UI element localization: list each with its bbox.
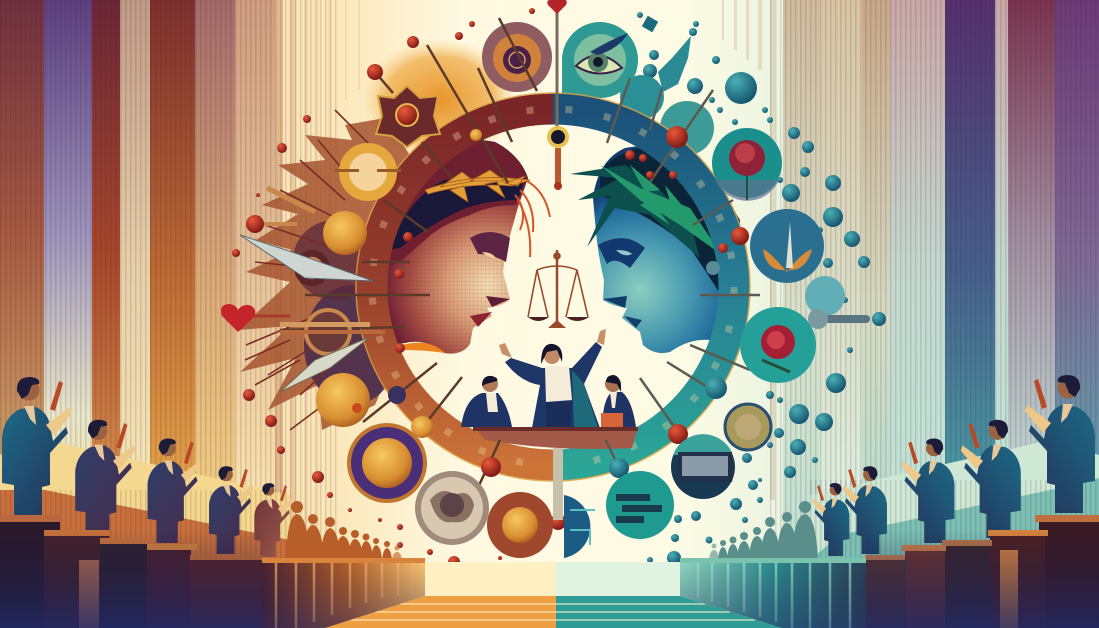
orange haze top left: [362, 38, 518, 162]
medallion top left: [482, 22, 552, 92]
centre glow left: [425, 562, 556, 596]
centre needle: [547, 12, 569, 190]
man 2: [75, 420, 135, 538]
leaf medallion: [750, 209, 824, 283]
star emblem: [376, 86, 440, 147]
rose medallion top: [712, 128, 782, 201]
left face: [370, 140, 550, 354]
man 9: [842, 466, 887, 554]
gold ring medallion: [335, 148, 401, 196]
man 5: [254, 483, 292, 557]
monitor medallion: [671, 434, 735, 499]
right men: [812, 375, 1095, 556]
spear head right: [658, 36, 691, 92]
judge bench: [473, 427, 638, 449]
man 1: [2, 377, 72, 515]
spiky halo left: [238, 110, 420, 430]
left nose and lips: [470, 312, 492, 327]
right hair: [600, 148, 735, 310]
man 3: [148, 439, 201, 543]
small diamond: [642, 16, 658, 32]
teal medallion top right: [620, 75, 664, 119]
man 8: [901, 439, 954, 543]
eye medallion: [562, 22, 638, 98]
right nose and lips: [624, 316, 642, 328]
red knob pin: [246, 215, 297, 233]
left curtains columns: [0, 0, 360, 550]
bottom centre post: [553, 448, 563, 520]
gold sphere upper: [323, 211, 367, 255]
benches right: [680, 515, 1099, 628]
bars medallion: [606, 471, 674, 539]
brass gear: [280, 310, 385, 354]
compass disc: [725, 404, 771, 450]
right face: [570, 146, 740, 353]
distant audience right: [709, 501, 818, 560]
left laurel: [425, 170, 530, 202]
pale disc: [805, 276, 845, 316]
silver blade lower: [280, 337, 370, 392]
right laurel: [600, 165, 722, 255]
ring markings: [372, 109, 734, 465]
gold sphere lower: [316, 373, 370, 427]
halo right dots: [607, 12, 886, 578]
left scatter dots: [232, 8, 535, 588]
right barrister: [601, 375, 636, 427]
ring left half: [372, 109, 553, 465]
teal sphere: [725, 72, 757, 104]
wainscot right: [810, 440, 1099, 560]
floor left: [325, 596, 556, 628]
scales of justice: [528, 250, 589, 328]
wainscot left: [0, 440, 290, 560]
right gauge disc: [660, 101, 714, 155]
tube pin: [267, 188, 315, 212]
ring outline: [356, 93, 750, 481]
stair lines: [350, 604, 755, 620]
right curtains columns: [722, 0, 1099, 540]
ring pins left: [280, 18, 537, 520]
rose medallion lower: [740, 307, 816, 383]
ring right half: [553, 109, 734, 465]
distant audience left: [286, 501, 402, 560]
ring pins right: [606, 78, 760, 470]
silver spear: [240, 235, 373, 281]
circuit medallion: [564, 495, 595, 558]
gold dial medallion: [347, 423, 427, 503]
striped disc: [294, 250, 330, 286]
ring knobs: [367, 64, 749, 530]
left barrister: [461, 376, 512, 427]
top heart pin: [547, 0, 567, 14]
man 6: [1025, 375, 1095, 513]
silver pin right: [808, 309, 870, 329]
man 7: [961, 420, 1021, 538]
centre glow right: [556, 562, 680, 596]
floor right: [556, 596, 782, 628]
central judge: [499, 329, 606, 428]
left men: [2, 377, 292, 557]
man 10: [812, 483, 849, 556]
heart pin: [221, 304, 290, 332]
ornate medallion: [415, 471, 489, 545]
left eye: [470, 232, 510, 262]
man 4: [209, 466, 254, 554]
gold orb medallion: [487, 492, 553, 558]
left hair: [375, 140, 528, 270]
right eye: [598, 238, 645, 268]
benches left: [0, 515, 425, 628]
